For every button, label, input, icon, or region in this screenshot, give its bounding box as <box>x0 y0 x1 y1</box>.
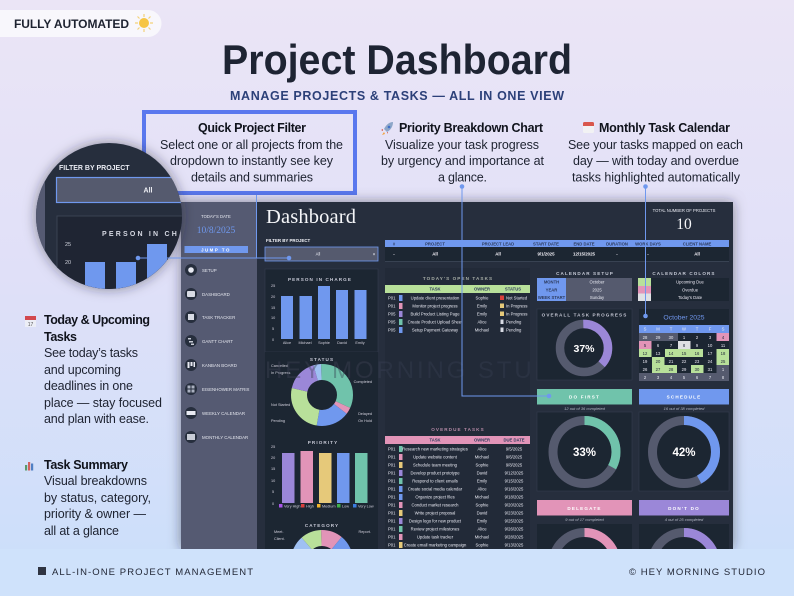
filter by project <box>265 238 378 261</box>
callout: today and upcoming tasks <box>25 313 162 426</box>
panel: calendar setup: Sunday <box>590 295 605 300</box>
calendar: october 2025: 15 <box>682 351 687 356</box>
project summary table: 12/15/2025 <box>573 252 596 256</box>
panel: calendar colors: CALENDAR COLORS <box>652 271 716 276</box>
calendar: october 2025: F <box>709 326 712 332</box>
panel: calendar colors: Overdue <box>682 288 699 292</box>
table: overdue tasks: 9/23/2025 <box>505 510 524 516</box>
calendar: october 2025: 22 <box>682 359 687 364</box>
project summary table: All <box>495 252 501 256</box>
chart: person in charge: Michael <box>298 341 312 345</box>
footer band <box>0 549 794 596</box>
chart: person in charge: Alice <box>283 341 291 345</box>
table: overdue tasks: P01 <box>388 502 396 508</box>
chart: status donut: Completed <box>354 380 372 384</box>
table: overdue tasks: David <box>477 510 488 516</box>
table: today's open tasks: Michael <box>475 328 489 332</box>
table: overdue tasks: P01 <box>388 534 396 540</box>
project summary table: - <box>616 252 618 256</box>
panel: schedule: SCHEDULE <box>667 394 701 400</box>
connector: priority breakdown <box>460 184 551 398</box>
callout: today and upcoming tasks: See today’s tasks <box>44 346 138 360</box>
table: overdue tasks: 9/26/2025 <box>505 526 524 532</box>
table: today's open tasks: Pending <box>506 320 522 324</box>
panel: sidebar <box>181 202 257 549</box>
project summary table: DURATION <box>606 241 628 246</box>
table: overdue tasks: P01 <box>388 510 396 516</box>
project summary table: - <box>393 252 395 256</box>
project summary table: WORK DAYS <box>635 241 661 246</box>
subtitle: MANAGE PROJECTS & TASKS — ALL IN ONE VIEW <box>230 89 564 103</box>
calendar: october 2025: 11 <box>721 343 726 348</box>
callout: priority breakdown chart: Visualize your task progress <box>385 138 539 152</box>
chart: person in charge: David <box>337 341 347 345</box>
table: overdue tasks: P01 <box>388 470 396 476</box>
chart: person in charge: 20 <box>271 295 275 299</box>
table: overdue tasks: Alice <box>477 526 487 532</box>
calendar: october 2025: 10 <box>708 343 713 348</box>
chart: status donut: STATUS <box>310 357 334 362</box>
table: overdue tasks: Alice <box>477 486 487 492</box>
watermark: HEY MORNING STUDIO <box>265 357 583 384</box>
panel: do first: DO FIRST <box>569 394 600 400</box>
panel: do first <box>537 389 632 491</box>
icon: rocket <box>381 122 393 135</box>
callout: priority breakdown chart <box>381 121 545 184</box>
table: overdue tasks: Conduct market research <box>411 502 459 508</box>
badge: fully automated: FULLY AUTOMATED <box>14 17 129 31</box>
table: today's open tasks: Emily <box>477 312 488 316</box>
calendar: october 2025: 4 <box>722 335 725 340</box>
calendar: october 2025: S <box>644 326 647 332</box>
callout: task summary: priority & owner — <box>44 507 146 521</box>
panel: sidebar: SETUP <box>202 268 217 273</box>
calendar: october 2025: 3 <box>709 335 712 340</box>
chart: category donut: Meet. <box>274 530 284 534</box>
table: today's open tasks: Update client presentation <box>411 296 460 300</box>
panel: calendar setup: YEAR <box>546 288 557 292</box>
chart: priority: High <box>306 504 314 508</box>
dashboard screenshot <box>181 202 730 549</box>
callout: monthly task calendar: See your tasks mapped on each <box>568 138 743 152</box>
callout: today and upcoming tasks: and upcoming <box>44 363 121 377</box>
panel: sidebar: MONTHLY CALENDAR <box>202 435 248 440</box>
calendar: october 2025: W <box>682 326 686 332</box>
table: overdue tasks: Respond to client emails <box>412 478 458 484</box>
magnifier circle: 25 <box>65 242 71 248</box>
table: overdue tasks: OWNER <box>474 438 490 442</box>
table: today's open tasks <box>385 276 530 333</box>
calendar: october 2025: 13 <box>656 351 661 356</box>
callout: priority breakdown chart: Priority Breakdown Chart <box>399 121 544 135</box>
callout: task summary: all at a glance <box>44 524 119 538</box>
table: today's open tasks: Sophie <box>475 296 489 300</box>
chart: priority <box>265 436 378 519</box>
chart: person in charge <box>265 269 378 352</box>
chart: person in charge: 10 <box>271 316 275 320</box>
chart: person in charge: 25 <box>271 284 275 288</box>
calendar: october 2025: 5 <box>644 343 647 348</box>
project summary table: 9/1/2025 <box>537 252 555 256</box>
callout: today and upcoming tasks: place — stay focused <box>44 396 162 410</box>
table: overdue tasks: 9/16/2025 <box>505 486 524 492</box>
icon: sun <box>135 14 153 32</box>
calendar: october 2025 <box>639 309 729 381</box>
chart: category donut: Report. <box>359 530 371 534</box>
dashboard shadow <box>181 202 733 549</box>
calendar: october 2025: 12 <box>643 351 648 356</box>
callout: quick project filter: details and summaries <box>191 170 313 184</box>
panel: calendar colors: Today's Date <box>678 295 703 300</box>
chart: person in charge: 5 <box>272 327 274 331</box>
calendar: october 2025: S <box>722 326 725 332</box>
panel: sidebar: JUMP TO <box>201 248 231 252</box>
calendar: october 2025: 28 <box>669 367 674 372</box>
table: overdue tasks: Design logo for new product <box>409 518 462 524</box>
table: overdue tasks: P01 <box>388 446 396 452</box>
panel: calendar setup: WEEK START <box>538 295 566 300</box>
callout: monthly task calendar: day — with today and overdue <box>573 154 739 168</box>
project summary table: All <box>432 252 438 256</box>
calendar: october 2025: 30 <box>695 367 700 372</box>
table: today's open tasks: OWNER <box>474 286 490 292</box>
table: overdue tasks: Michael <box>475 454 489 460</box>
chart: priority: 5 <box>272 490 274 494</box>
chart: priority: Very Low <box>358 504 374 508</box>
table: overdue tasks: 9/20/2025 <box>505 502 524 508</box>
table: overdue tasks: TASK <box>429 438 441 442</box>
panel: schedule <box>639 389 729 491</box>
table: overdue tasks: 9/25/2025 <box>505 518 524 524</box>
connector: monthly calendar <box>643 184 648 318</box>
calendar: october 2025: 1 <box>722 367 725 372</box>
icon: calendar <box>583 122 594 133</box>
footer left label: ALL-IN-ONE PROJECT MANAGEMENT <box>52 567 253 578</box>
chart: person in charge: 0 <box>272 338 274 342</box>
chart: status donut: Delayed <box>358 412 372 416</box>
project summary table: START DATE <box>533 241 559 246</box>
total number of projects: 10 <box>676 216 692 233</box>
magnifier circle: PERSON IN CHARGE <box>102 231 208 238</box>
table: overdue tasks: DUE DATE <box>503 438 525 442</box>
calendar: october 2025: 16 <box>695 351 700 356</box>
table: today's open tasks: P05 <box>388 312 396 316</box>
panel: delegate: 9 out of 17 completed <box>565 517 605 522</box>
project summary table: All <box>694 252 700 256</box>
calendar: october 2025: 9 <box>696 343 699 348</box>
calendar: october 2025: T <box>696 326 699 332</box>
panel: task tables backdrop <box>385 268 530 549</box>
panel: calendar setup <box>537 271 632 301</box>
calendar: october 2025: 3 <box>657 375 660 380</box>
table: today's open tasks: Build Product Listing Page <box>410 312 460 316</box>
table: overdue tasks <box>385 427 530 548</box>
panel: don't do: 4 out of 25 completed <box>665 517 704 522</box>
chart: priority: PRIORITY <box>308 440 338 445</box>
calendar: october 2025: 8 <box>683 343 686 348</box>
table: overdue tasks: Alice <box>477 446 487 452</box>
table: overdue tasks: Emily <box>477 478 488 484</box>
table: overdue tasks: 9/12/2025 <box>505 470 524 476</box>
magnifier circle: 20 <box>65 260 71 266</box>
total number of projects: TOTAL NUMBER OF PROJECTS <box>653 208 716 213</box>
chart: person in charge: 15 <box>271 306 275 310</box>
calendar: october 2025: 29 <box>682 367 687 372</box>
table: overdue tasks: Michael <box>475 534 489 540</box>
connector: quick project filter <box>136 195 291 260</box>
table: overdue tasks: Update website content <box>413 454 458 460</box>
chart: priority: Very High <box>284 504 300 508</box>
chart: priority: 20 <box>271 456 275 460</box>
heading: dashboard: Dashboard <box>266 206 356 228</box>
calendar: october 2025: 27 <box>656 367 661 372</box>
table: overdue tasks: Create social media calendar <box>408 486 463 492</box>
calendar: october 2025: 8 <box>722 375 725 380</box>
table: today's open tasks: Setup Payment Gateway <box>412 328 459 332</box>
calendar: october 2025: 14 <box>669 351 674 356</box>
chart: status donut: Pending <box>271 419 285 423</box>
calendar: october 2025: 24 <box>708 359 713 364</box>
table: today's open tasks: Emily <box>477 304 488 308</box>
table: overdue tasks: 9/6/2025 <box>506 454 523 460</box>
panel: sidebar: KANBAN BOARD <box>202 363 237 368</box>
table: overdue tasks: P01 <box>388 478 396 484</box>
calendar: october 2025: 23 <box>695 359 700 364</box>
panel: sidebar: WEEKLY CALENDAR <box>202 411 245 416</box>
table: overdue tasks: 9/28/2025 <box>505 534 524 540</box>
table: overdue tasks: Schedule team meeting <box>413 462 458 468</box>
callout: monthly task calendar: tasks highlighted automatically <box>572 170 741 184</box>
project summary table: CLIENT NAME <box>683 241 712 246</box>
panel: schedule: 16 out of 38 completed <box>664 406 705 411</box>
panel: calendar colors <box>638 271 729 301</box>
table: overdue tasks: Update task tracker <box>417 534 454 540</box>
calendar: october 2025: 2 <box>644 375 647 380</box>
chart: person in charge: PERSON IN CHARGE <box>288 277 352 282</box>
chart: status donut <box>265 352 378 436</box>
table: today's open tasks: Create Product Upload Sheet <box>408 320 463 324</box>
panel: sidebar: DASHBOARD <box>202 292 230 297</box>
table: overdue tasks: P01 <box>388 518 396 524</box>
calendar: october 2025: 30 <box>669 335 674 340</box>
callout: task summary: by status, category, <box>44 491 151 505</box>
table: overdue tasks: P01 <box>388 542 396 548</box>
table: today's open tasks: Monitor project progress <box>412 304 458 308</box>
calendar: october 2025: 29 <box>656 335 661 340</box>
chart: person in charge: Sophie <box>318 341 330 345</box>
project summary table: END DATE <box>573 241 595 246</box>
table: overdue tasks: OVERDUE TASKS <box>431 427 485 432</box>
title: Project Dashboard <box>222 36 572 83</box>
magnifier circle: All <box>144 188 153 194</box>
callout: quick project filter: Select one or all projects from the <box>160 138 343 152</box>
panel: don't do: DON'T DO <box>668 506 700 511</box>
panel: sidebar: TASK TRACKER <box>202 315 235 320</box>
callout: quick project filter: dropdown to instantly see key <box>170 154 334 168</box>
panel: calendar setup: CALENDAR SETUP <box>556 271 614 276</box>
chart: category donut: CATEGORY <box>305 523 339 528</box>
callout: today and upcoming tasks: Today & Upcoming <box>44 313 150 327</box>
table: overdue tasks: Create email marketing campaign <box>404 542 467 548</box>
callout: task summary: Task Summary <box>44 458 128 472</box>
chart: priority: Medium <box>322 504 336 508</box>
panel: sidebar: EISENHOWER MATRIX <box>202 387 250 392</box>
table: overdue tasks: P01 <box>388 454 396 460</box>
chart: overall task progress <box>537 309 632 380</box>
table: overdue tasks: 9/18/2025 <box>505 494 524 500</box>
project summary table: PROJECT LEAD <box>482 241 514 246</box>
table: overdue tasks: Sophie <box>475 542 489 548</box>
table: overdue tasks: Review project milestones <box>411 526 459 532</box>
panel: sidebar: TODAY'S DATE <box>201 214 231 219</box>
panel: sidebar: GANTT CHART <box>202 339 233 344</box>
calendar: october 2025: 20 <box>656 359 661 364</box>
chart: status donut: Cancelled <box>271 364 288 368</box>
calendar: october 2025: 31 <box>708 367 713 372</box>
panel: sidebar: 10/8/2025 <box>197 226 236 236</box>
callout: today and upcoming tasks: deadlines in one <box>44 379 133 393</box>
callout: monthly task calendar <box>568 121 743 184</box>
panel: do first: 12 out of 36 completed <box>564 406 606 411</box>
table: overdue tasks: P01 <box>388 526 396 532</box>
calendar: october 2025: 25 <box>721 359 726 364</box>
table: overdue tasks: 9/13/2025 <box>505 542 524 548</box>
table: today's open tasks: Pending <box>506 328 522 332</box>
callout: task summary: Visual breakdowns <box>44 474 147 488</box>
callout: today and upcoming tasks: and plan with ease. <box>44 412 149 426</box>
calendar: october 2025: M <box>656 326 660 332</box>
table: today's open tasks: P01 <box>388 296 396 300</box>
filter by project: ▾ <box>373 252 375 256</box>
chart: person in charge: Emily <box>355 341 365 345</box>
panel: delegate: DELEGATE <box>567 506 602 511</box>
calendar: october 2025: 28 <box>643 335 648 340</box>
panel: calendar colors: Upcoming Due <box>676 280 705 284</box>
table: today's open tasks: Alice <box>477 320 487 324</box>
project summary table: - <box>647 252 649 256</box>
magnifier circle <box>36 143 208 302</box>
table: overdue tasks: Develop product prototype <box>410 470 460 476</box>
panel: calendar setup: October <box>590 280 605 284</box>
calendar: october 2025: 1 <box>683 335 686 340</box>
chart: category donut <box>265 519 378 549</box>
table: overdue tasks: P01 <box>388 462 396 468</box>
panel: calendar setup: MONTH <box>544 280 559 284</box>
callout: quick project filter: Quick Project Filter <box>198 121 306 135</box>
chart: priority: 25 <box>271 445 275 449</box>
project summary table <box>385 240 729 262</box>
icon: tear-off calendar: 17 <box>28 322 33 328</box>
calendar: october 2025: 26 <box>643 367 648 372</box>
calendar: october 2025: 18 <box>721 351 726 356</box>
table: overdue tasks: Emily <box>477 518 488 524</box>
calendar: october 2025: 19 <box>643 359 648 364</box>
table: today's open tasks: P05 <box>388 328 396 332</box>
chart: status donut: On Hold <box>358 419 372 423</box>
callout: priority breakdown chart: a glance. <box>438 170 487 184</box>
callout: quick project filter <box>144 112 355 193</box>
chart: category donut: Client. <box>274 537 285 541</box>
project summary table: # <box>393 241 396 246</box>
panel: don't do <box>639 500 729 549</box>
calendar: october 2025: 7 <box>670 343 673 348</box>
chart: overall task progress: 37% <box>573 343 595 355</box>
filter by project: All <box>316 252 320 256</box>
calendar: october 2025: 5 <box>683 375 686 380</box>
calendar: october 2025: 6 <box>657 343 660 348</box>
chart: priority: 15 <box>271 467 275 471</box>
filter by project: FILTER BY PROJECT <box>266 238 311 243</box>
panel: do first: 33% <box>573 447 596 459</box>
chart: status donut: Not Started <box>271 403 290 407</box>
callout: today and upcoming tasks: Tasks <box>44 330 77 344</box>
calendar: october 2025: October 2025 <box>663 314 705 322</box>
table: today's open tasks: In Progress <box>506 304 527 308</box>
calendar: october 2025: 4 <box>670 375 673 380</box>
calendar: october 2025: T <box>670 326 673 332</box>
panel: delegate <box>537 500 632 549</box>
calendar: october 2025: 6 <box>696 375 699 380</box>
badge: fully automated <box>0 10 162 37</box>
panel: schedule: 42% <box>672 447 696 459</box>
callout: monthly task calendar: Monthly Task Calendar <box>599 121 730 135</box>
calendar: october 2025: 2 <box>696 335 699 340</box>
table: overdue tasks: P01 <box>388 486 396 492</box>
project summary table: PROJECT <box>425 241 445 246</box>
total number of projects <box>652 209 716 229</box>
chart: priority: 10 <box>271 479 275 483</box>
table: overdue tasks: 9/15/2025 <box>505 478 524 484</box>
table: overdue tasks: Research new marketing strategies <box>402 446 468 452</box>
table: today's open tasks: In Progress <box>506 312 527 316</box>
calendar: october 2025: 7 <box>709 375 712 380</box>
calendar: october 2025: 17 <box>708 351 713 356</box>
callout: priority breakdown chart: by urgency and importance at <box>381 154 545 168</box>
table: overdue tasks: 9/5/2025 <box>506 446 523 452</box>
table: overdue tasks: Organize project files <box>415 494 455 500</box>
magnifier circle: FILTER BY PROJECT <box>59 165 130 172</box>
table: overdue tasks: David <box>477 470 488 476</box>
chart: priority: Low <box>342 504 349 508</box>
table: overdue tasks: P01 <box>388 494 396 500</box>
table: overdue tasks: Write project proposal <box>415 510 455 516</box>
chart: priority: 0 <box>272 502 274 506</box>
table: today's open tasks: TASK <box>429 286 441 292</box>
table: overdue tasks: 9/8/2025 <box>506 462 523 468</box>
table: today's open tasks: P05 <box>388 320 396 324</box>
table: today's open tasks: STATUS <box>505 286 521 292</box>
table: today's open tasks: TODAY'S OPEN TASKS <box>423 276 493 281</box>
table: overdue tasks: Sophie <box>475 502 489 508</box>
chart: overall task progress: OVERALL TASK PROGRESS <box>542 312 627 318</box>
table: overdue tasks: Sophie <box>475 462 489 468</box>
table: today's open tasks: Not Started <box>506 296 528 300</box>
chart: status donut: In Progress <box>271 371 291 375</box>
panel: calendar setup: 2025 <box>592 288 602 292</box>
calendar: october 2025: 21 <box>669 359 674 364</box>
table: today's open tasks: P01 <box>388 304 396 308</box>
callout: task summary <box>25 458 151 538</box>
footer right label: © HEY MORNING STUDIO <box>629 567 765 578</box>
icon: bar chart <box>25 462 33 470</box>
table: overdue tasks: Michael <box>475 494 489 500</box>
